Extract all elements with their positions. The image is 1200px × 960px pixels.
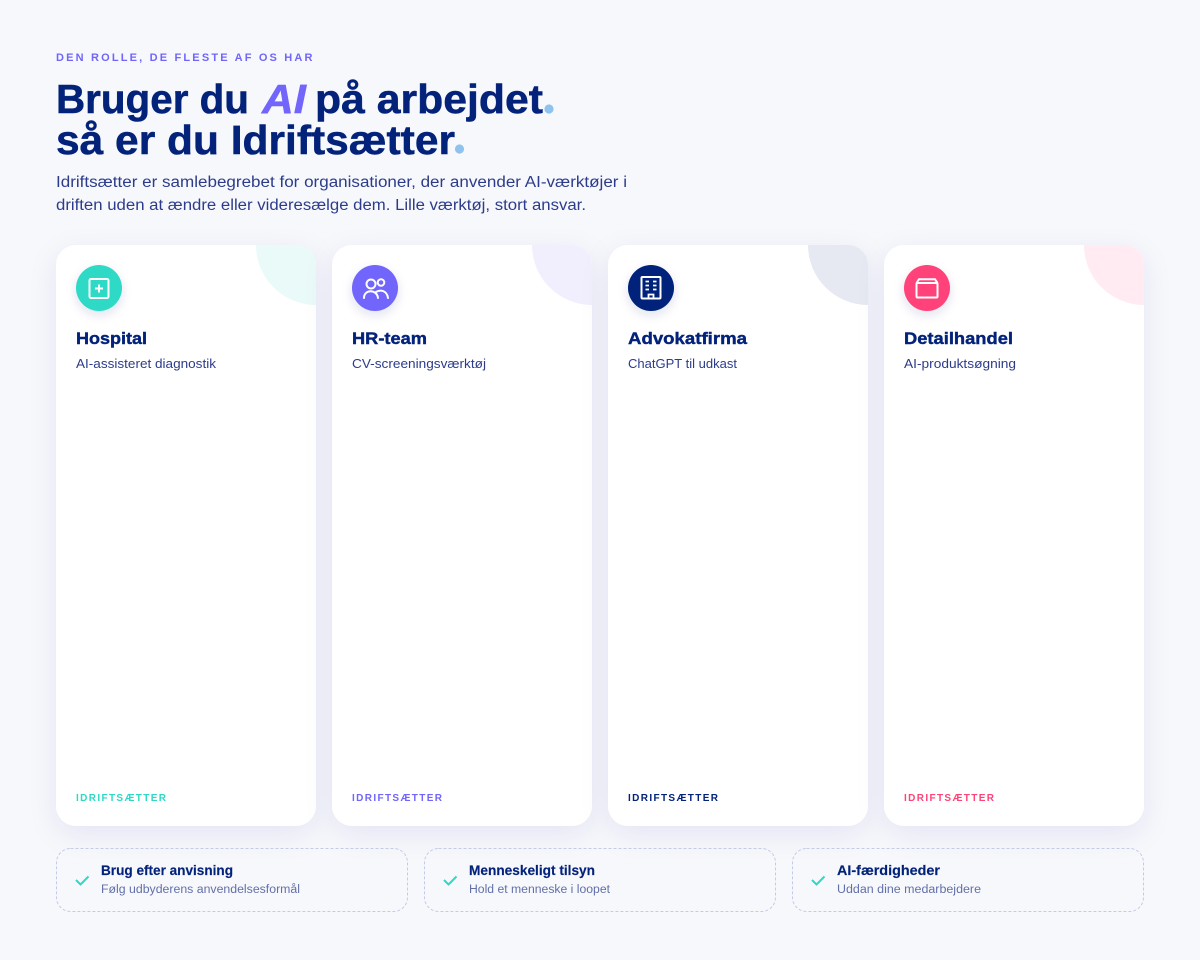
card title: HR-team: [352, 329, 427, 348]
card tag: IDRIFTSÆTTER: [352, 793, 443, 804]
panel: Brug efter anvisning: [56, 848, 408, 912]
eyebrow: DEN ROLLE, DE FLESTE AF OS HAR: [56, 52, 313, 64]
title: Bruger du: [56, 76, 249, 122]
title: så er du Idriftsætter: [56, 117, 455, 163]
icon: check: [76, 876, 88, 884]
intro text: [56, 174, 627, 214]
panel: Menneskeligt tilsyn: [424, 848, 776, 912]
title: [56, 76, 554, 163]
icon: store box: [904, 265, 950, 311]
card title: Hospital: [76, 329, 147, 348]
card title: Detailhandel: [904, 329, 1013, 348]
intro text: driften uden at ændre eller videresælge dem. Lille værktøj, stort ansvar.: [56, 197, 586, 214]
title: på arbejdet: [315, 76, 543, 122]
icon: people: [352, 265, 398, 311]
card description: AI-produktsøgning: [904, 357, 1016, 371]
tip text: Følg udbyderens anvendelsesformål: [101, 884, 300, 896]
card tag: IDRIFTSÆTTER: [904, 793, 995, 804]
intro text: Idriftsætter er samlebegrebet for organisationer, der anvender AI-værktøjer i: [56, 174, 627, 191]
tip text: Hold et menneske i loopet: [469, 884, 611, 896]
title: AI: [261, 76, 308, 122]
card description: ChatGPT til udkast: [628, 357, 738, 371]
panel: Hospital: [54, 245, 318, 836]
card tag: IDRIFTSÆTTER: [76, 793, 167, 804]
card tag: IDRIFTSÆTTER: [628, 793, 719, 804]
icon: medical cross: [76, 265, 122, 311]
panel: Advokatfirma: [606, 245, 870, 836]
panel: Detailhandel: [882, 245, 1146, 836]
card title: Advokatfirma: [628, 329, 748, 348]
icon: check: [812, 876, 824, 884]
panel: AI-færdigheder: [792, 848, 1144, 912]
tip title: Brug efter anvisning: [101, 863, 233, 878]
card description: CV-screeningsværktøj: [352, 357, 486, 371]
icon: check: [444, 876, 456, 884]
tip title: AI-færdigheder: [837, 863, 941, 878]
panel: HR-team: [330, 245, 594, 836]
icon: office building: [628, 265, 674, 311]
tip title: Menneskeligt tilsyn: [469, 863, 595, 878]
card description: AI-assisteret diagnostik: [76, 357, 217, 371]
tip text: Uddan dine medarbejdere: [837, 884, 981, 896]
